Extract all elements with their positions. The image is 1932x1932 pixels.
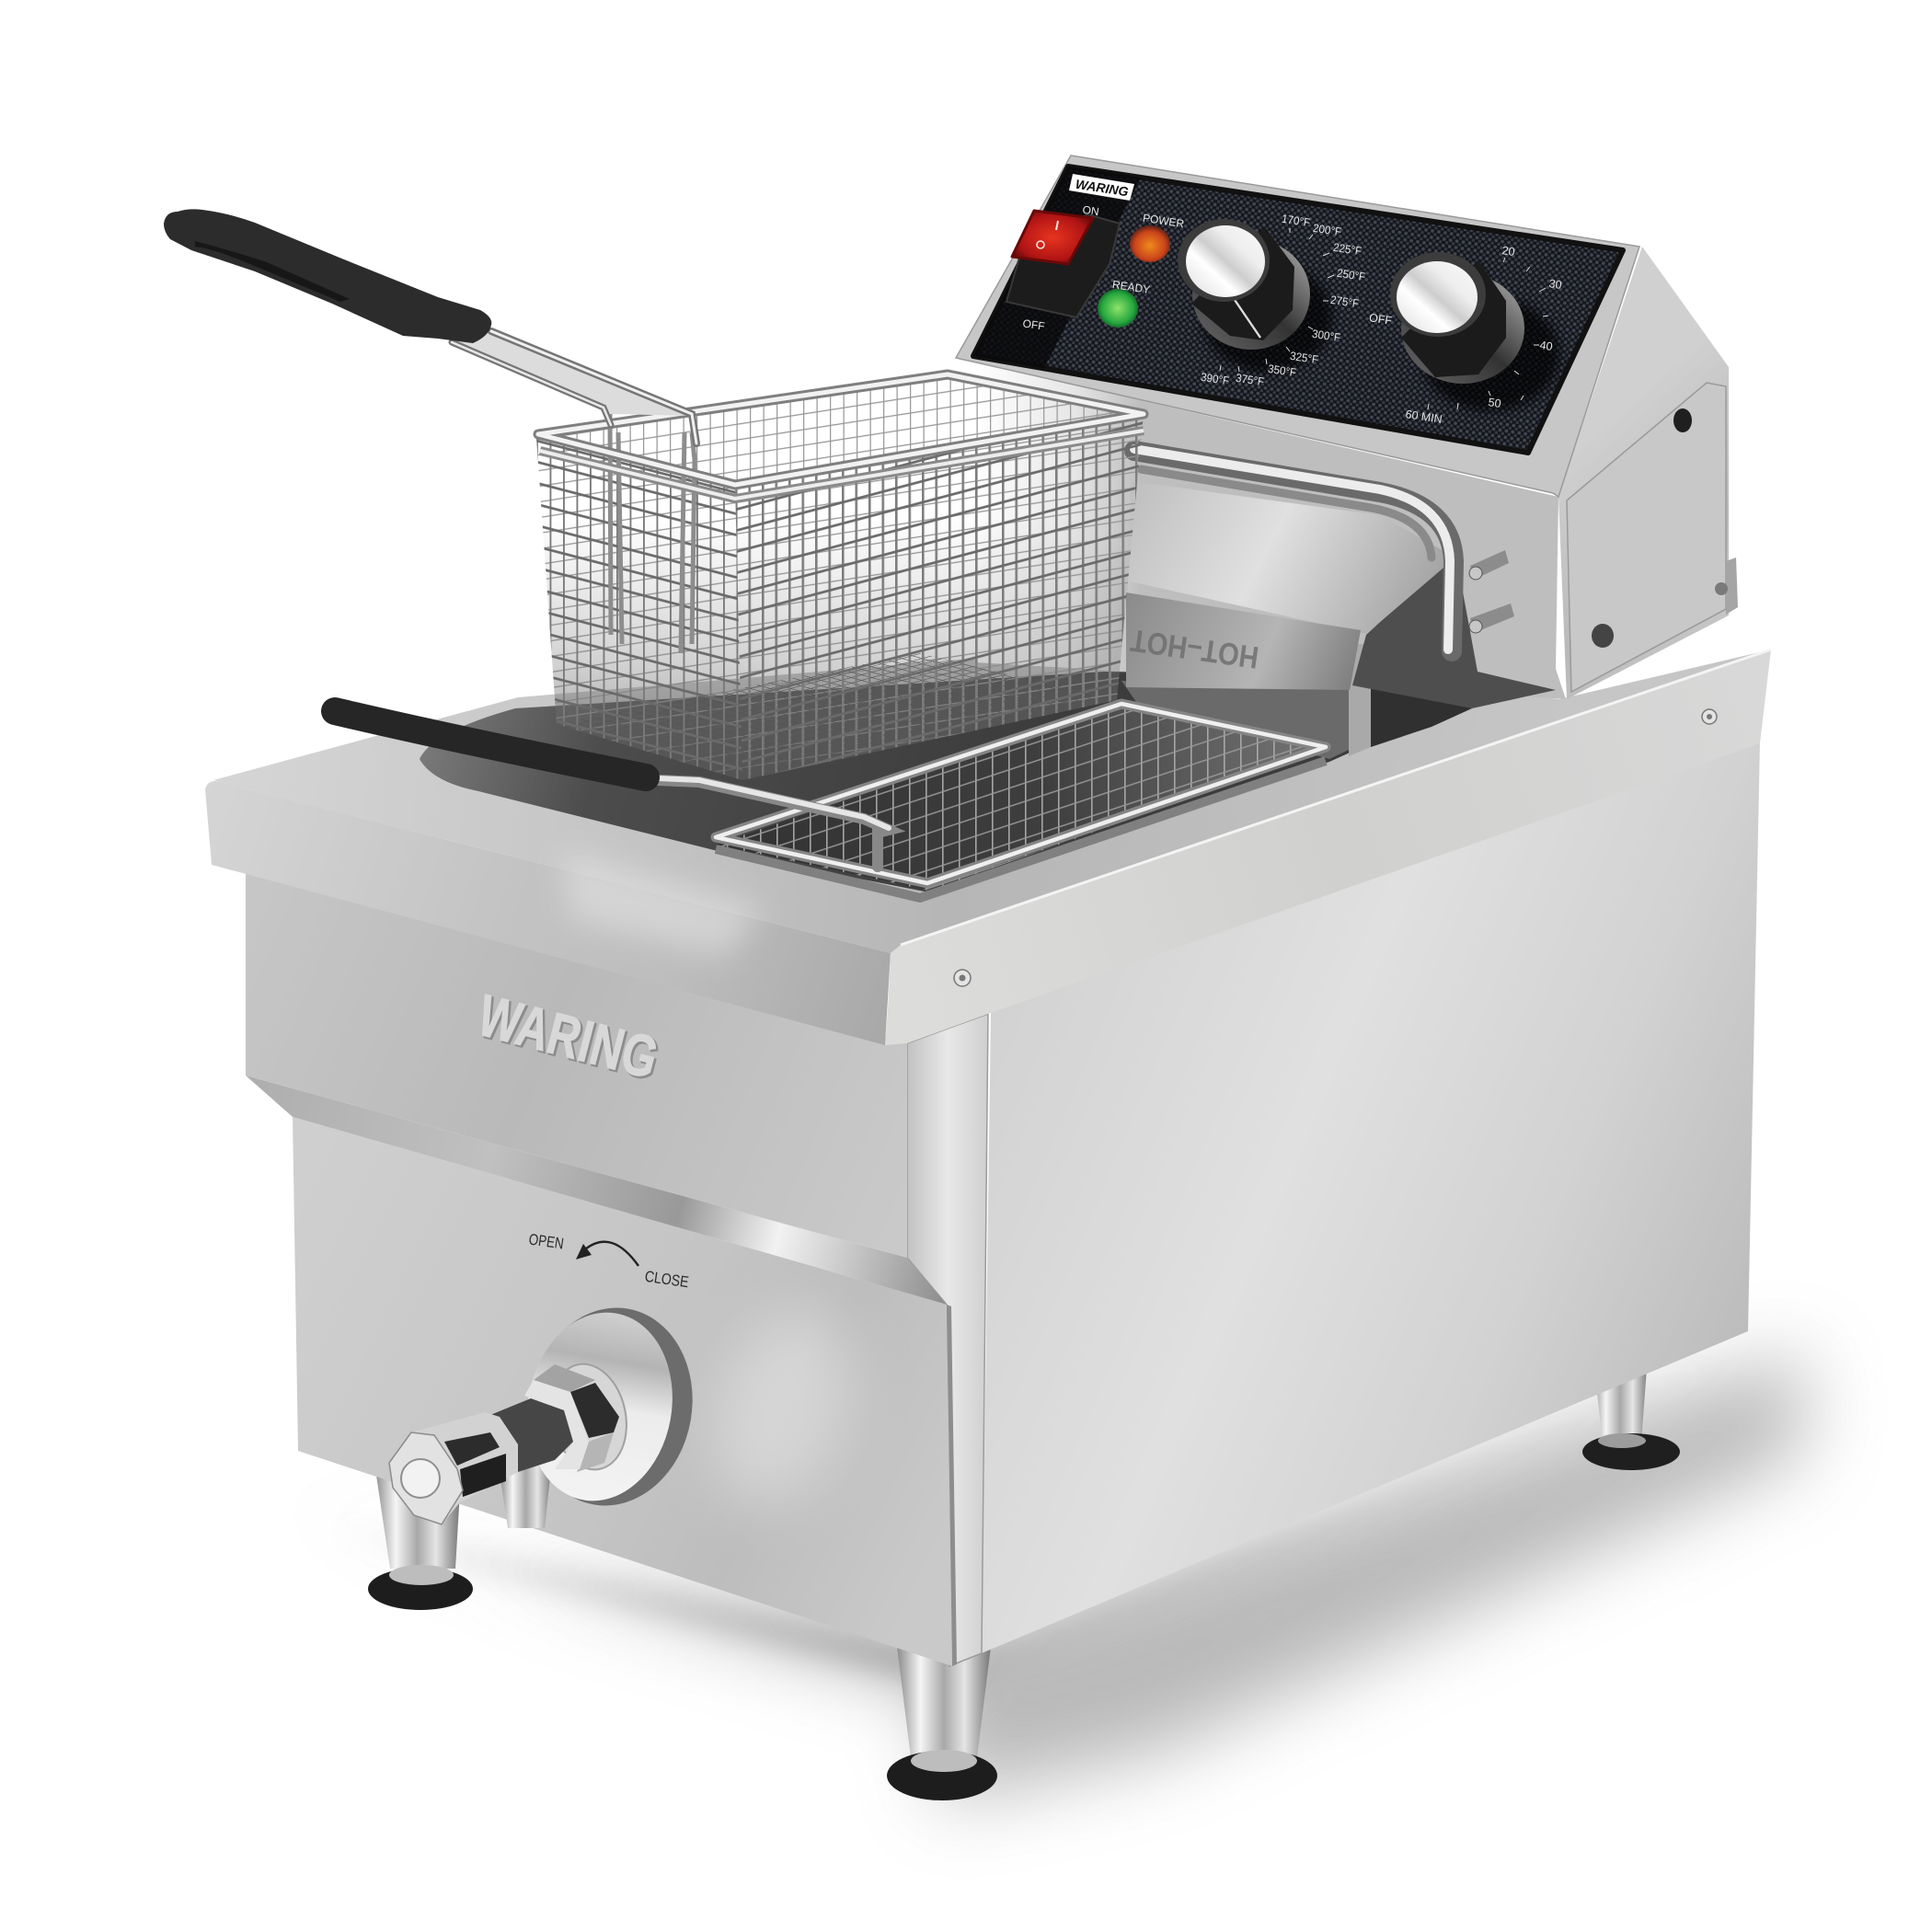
housing bolt low — [1592, 624, 1614, 648]
oil well opening — [420, 672, 1432, 894]
front right foot — [887, 1647, 997, 1800]
deck top surface — [213, 644, 1771, 953]
lower stamped plate — [1126, 592, 1361, 690]
valve nut ring — [542, 1357, 636, 1477]
chrome heater tube — [1134, 449, 1454, 651]
basket hooks — [610, 414, 695, 653]
valve spout — [500, 1460, 552, 1528]
valve nut faces — [524, 1364, 619, 1472]
housing bolt right — [1715, 558, 1738, 615]
basket black grip — [164, 209, 491, 343]
timer scale: 30 — [1548, 277, 1563, 292]
corner screw — [954, 970, 971, 986]
temperature scale: 300°F — [1311, 328, 1341, 344]
basket short face mesh — [536, 437, 742, 780]
label ready: READY — [1111, 278, 1151, 296]
temperature knob — [1178, 219, 1332, 373]
front lip — [205, 781, 891, 1045]
stamped lettering reflection: HOT–HOT — [1128, 622, 1260, 674]
basket lower rail highlight — [540, 431, 1144, 499]
timer knob — [1390, 252, 1559, 411]
knob skirt — [1192, 239, 1310, 350]
embossed brand on front: WARING — [472, 982, 664, 1091]
small basket rod — [658, 778, 889, 867]
front left foot — [368, 1463, 473, 1610]
valve flange — [512, 1294, 707, 1519]
label power: POWER — [1142, 212, 1185, 230]
small basket mesh — [716, 707, 1326, 891]
timer skirt — [1401, 273, 1524, 384]
knob pointer — [1233, 297, 1260, 338]
knob cast shadow — [1203, 262, 1332, 373]
temperature scale — [1200, 213, 1366, 388]
basket upper rail highlight — [538, 374, 1144, 485]
rocker switch base — [1006, 214, 1120, 317]
lower front panel — [293, 1117, 957, 1666]
heater terminals — [1469, 550, 1514, 633]
temperature scale: 325°F — [1289, 350, 1319, 366]
knob body — [1191, 227, 1294, 340]
basket handle rods — [452, 329, 696, 443]
small basket interior — [716, 707, 1326, 891]
knob cap — [1178, 219, 1270, 302]
temperature scale: 275°F — [1329, 293, 1360, 310]
temperature scale: 250°F — [1336, 267, 1366, 283]
embossed brand on front: WARING — [474, 983, 666, 1093]
temperature ticks — [1220, 228, 1334, 372]
control panel bezel — [956, 155, 1639, 497]
lip highlight — [561, 851, 764, 957]
temperature scale: 200°F — [1312, 222, 1342, 238]
label on: ON — [1082, 203, 1100, 218]
ready lamp — [1098, 289, 1138, 328]
small basket rim highlight — [716, 704, 1326, 883]
valve cap — [389, 1412, 518, 1524]
heater cover plate — [1126, 481, 1455, 634]
right side panel — [982, 741, 1760, 1653]
basket upper rail — [538, 374, 1144, 485]
timer scale: OFF — [1368, 311, 1393, 328]
housing fold plate — [1567, 383, 1726, 692]
small basket grip — [335, 711, 646, 777]
floor shadow — [276, 1352, 1803, 1803]
timer scale: 50 — [1488, 396, 1502, 410]
valve label open: OPEN — [528, 1231, 565, 1253]
backsplash wall — [956, 358, 1566, 699]
black left end — [973, 167, 1141, 368]
small basket rim — [716, 704, 1326, 883]
timer scale: 60 MIN — [1405, 408, 1443, 426]
temperature scale: 390°F — [1200, 371, 1230, 387]
timer ticks — [1428, 258, 1548, 409]
well back wall — [1121, 681, 1349, 759]
control panel — [973, 167, 1623, 453]
vertical divider post — [1349, 644, 1371, 756]
upper front panel — [246, 856, 907, 1258]
housing side panel — [1558, 247, 1729, 699]
power lamp — [1130, 225, 1170, 262]
large fry basket — [164, 209, 1144, 780]
timer cast shadow — [1421, 297, 1559, 411]
rear rim screw — [1702, 709, 1717, 724]
dark cavity behind element cover — [1352, 552, 1556, 708]
rear right foot — [1582, 1343, 1680, 1470]
housing hole — [1673, 408, 1692, 432]
label off: OFF — [1022, 316, 1046, 333]
small basket lower rail — [716, 761, 1326, 898]
timer scale: 20 — [1501, 244, 1516, 259]
temperature scale: 350°F — [1267, 362, 1297, 379]
timer cap — [1390, 252, 1486, 337]
temperature scale: 225°F — [1332, 241, 1363, 258]
knob silver disc — [1186, 225, 1265, 297]
sloped chamfer — [246, 1075, 947, 1305]
carbon fibre panel face — [973, 167, 1623, 453]
rim fold highlight — [901, 650, 1771, 945]
front corner strip — [907, 1014, 988, 1666]
valve label close: CLOSE — [644, 1268, 690, 1291]
control housing and back splash — [956, 155, 1738, 759]
basket floor mesh — [557, 653, 1117, 780]
right rim band — [885, 650, 1771, 1045]
fryer body — [205, 644, 1771, 1800]
rocker switch red — [1012, 211, 1093, 264]
brand badge: WARING — [1075, 177, 1130, 199]
basket long face mesh — [735, 414, 1144, 780]
temperature scale: 375°F — [1235, 372, 1265, 388]
oil well seen through basket — [536, 374, 1144, 780]
basket back mesh — [536, 374, 1144, 780]
timer silver disc — [1397, 261, 1478, 333]
timer scale — [1368, 244, 1563, 426]
timer scale: 40 — [1539, 339, 1554, 353]
well dark right end — [1371, 676, 1472, 747]
valve stem — [490, 1398, 573, 1472]
small fry basket — [335, 704, 1326, 898]
basket lower rail — [540, 431, 1144, 499]
temperature scale: 170°F — [1281, 213, 1311, 229]
timer body — [1401, 260, 1506, 377]
drain valve — [389, 1294, 707, 1528]
valve direction arrow — [576, 1242, 638, 1266]
embossed brand on front — [472, 982, 666, 1093]
